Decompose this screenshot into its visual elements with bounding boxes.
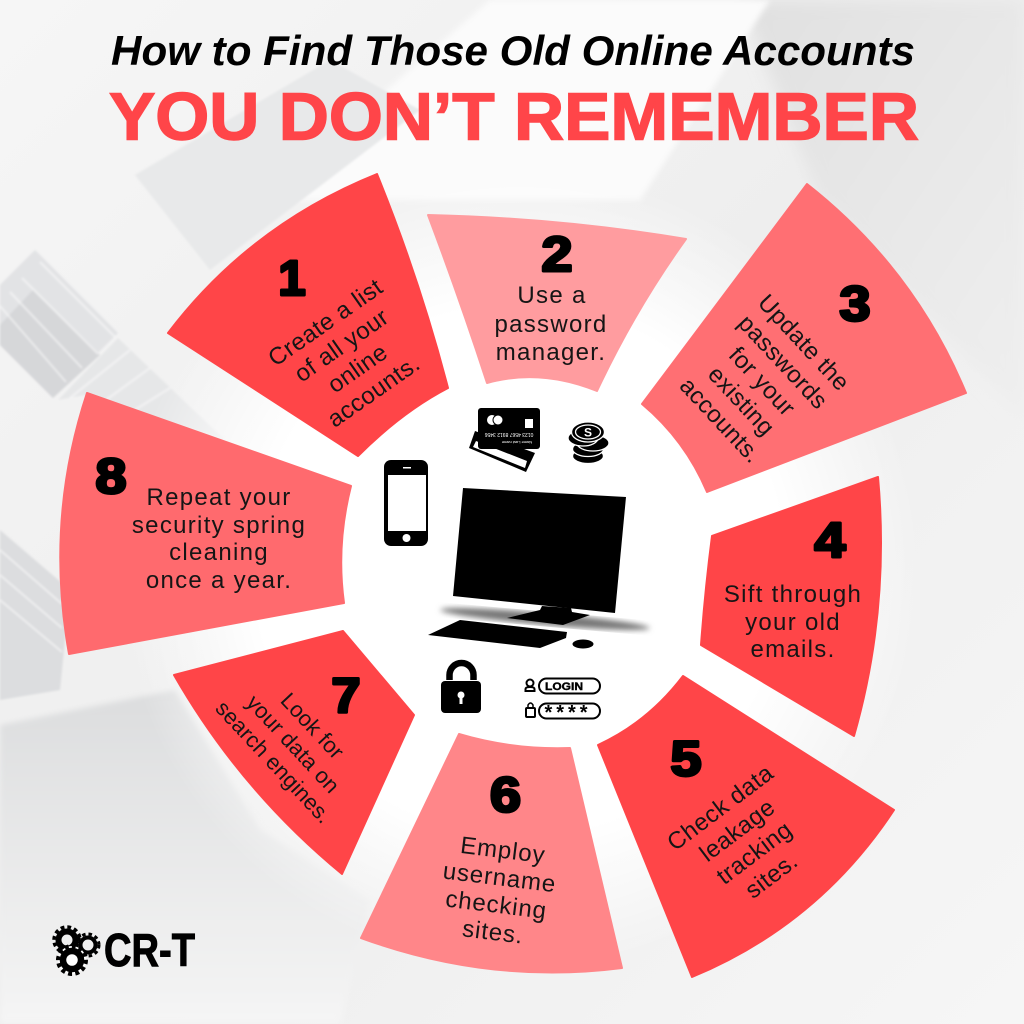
logo — [54, 924, 195, 976]
number 4: 4 — [814, 514, 846, 568]
text 6: username — [441, 858, 558, 898]
number 6: 6 — [490, 768, 521, 822]
text 5: leakage — [695, 794, 780, 868]
segment 6 — [361, 734, 622, 973]
wordmark: CR-T — [104, 924, 195, 976]
number 1: 1 — [278, 252, 306, 306]
segment 4 — [701, 477, 881, 736]
text 3: passwords — [732, 310, 833, 415]
text 3: existing — [702, 361, 780, 441]
text 7: search engines. — [211, 696, 337, 828]
text 1: online — [323, 339, 393, 399]
text 2 — [494, 282, 608, 366]
text 5: Check data — [662, 759, 779, 857]
number 2: 2 — [542, 228, 572, 282]
icon: credit cards — [469, 408, 540, 472]
segment 8 — [60, 393, 351, 654]
segment 7 — [174, 631, 414, 874]
text 1: Create a list — [263, 274, 388, 372]
title line 2: YOU DON’T REMEMBER — [109, 80, 919, 154]
text 2: manager. — [496, 339, 606, 366]
icon: login form: **** — [544, 702, 588, 724]
text 4: emails. — [750, 636, 836, 663]
segment 1 — [168, 174, 448, 456]
text 6: sites. — [461, 915, 525, 950]
text 3 — [669, 289, 855, 474]
text 2: password — [494, 311, 608, 338]
gears — [54, 927, 99, 974]
monitor — [453, 488, 626, 613]
text 1: of all your — [290, 304, 394, 388]
text 7: Look for — [276, 688, 349, 764]
icon: login form: LOGIN — [545, 681, 583, 693]
text 2: Use a — [517, 282, 587, 309]
icon: credit cards: 0123 4567 8912 3456 — [484, 431, 533, 437]
text 8: cleaning — [169, 539, 269, 566]
icon: smartphone — [384, 460, 428, 546]
text 4: your old — [745, 609, 841, 636]
title line 1: How to Find Those Old Online Accounts — [111, 27, 915, 74]
keyboard — [428, 620, 567, 648]
icon: credit cards: Name Last name — [501, 440, 532, 445]
text 5: sites. — [740, 848, 803, 904]
text 7 — [211, 659, 376, 828]
icon: coins: S — [584, 426, 592, 440]
number 3: 3 — [840, 278, 870, 332]
icon: computer — [428, 488, 650, 648]
text 5 — [662, 759, 830, 924]
text 6 — [435, 830, 561, 953]
text 6: checking — [444, 886, 548, 925]
number 8: 8 — [96, 450, 126, 504]
text 6: Employ — [459, 832, 547, 869]
text 3: Update the — [752, 289, 855, 396]
title — [109, 27, 919, 154]
text 8 — [132, 484, 306, 594]
icon: padlock — [441, 663, 481, 713]
mouse — [572, 640, 594, 648]
segment 2 — [428, 215, 686, 391]
desk shadow — [440, 604, 650, 634]
text 1 — [263, 274, 436, 441]
icon: login form — [526, 678, 600, 724]
text 3: accounts. — [674, 373, 766, 469]
text 1: accounts. — [323, 350, 425, 433]
text 4: Sift through — [724, 581, 862, 608]
number 5: 5 — [670, 732, 702, 786]
icon: coins — [568, 422, 609, 464]
text 3: for your — [723, 342, 801, 422]
text 5: tracking — [712, 816, 798, 890]
text 4 — [724, 581, 862, 663]
text 8: once a year. — [146, 567, 292, 594]
text 7: your data on — [241, 690, 345, 798]
segment 3 — [642, 184, 966, 492]
text 8: security spring — [132, 512, 306, 539]
text 8: Repeat your — [146, 484, 292, 511]
segment 5 — [598, 676, 894, 977]
number 7: 7 — [332, 670, 360, 724]
